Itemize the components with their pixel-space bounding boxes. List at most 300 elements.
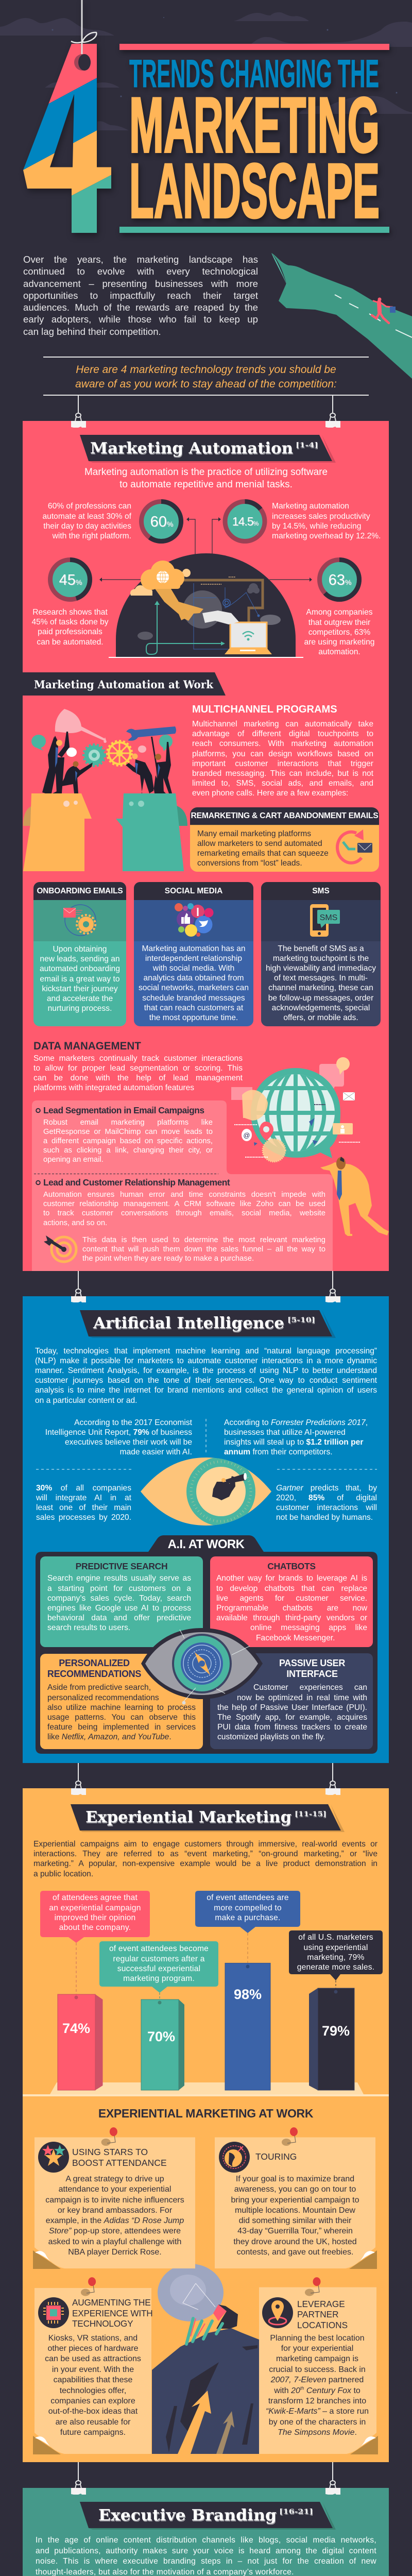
stat: forrester: insights will steal up to $1.2 trillion per (224, 1438, 363, 1447)
multichannel programs text: Multichannel marketing can automatically take (192, 720, 373, 728)
stat: forrester: According to Forrester Predictions 2017, (224, 1418, 368, 1427)
stat: 63% donut (317, 557, 362, 602)
bar value labels (52, 1984, 360, 2045)
section title text: Marketing Automation (90, 439, 293, 457)
stat: 60% text: automate at least 30% of (42, 512, 131, 521)
note text: other pieces of hardware (47, 2344, 139, 2353)
stat: forrester: businesses that utilize AI-powered (224, 1428, 346, 1437)
callout: 79 percent: generate more sales. (297, 1963, 374, 1972)
multichannel programs heading: MULTICHANNEL PROGRAMS (192, 703, 337, 715)
title: trends changing the marketing landscape (119, 44, 391, 236)
card: chatbots: live agents for customer service. (216, 1594, 367, 1603)
note text: are also reusable for (56, 2418, 130, 2427)
stat: 45% text: Research shows that (32, 608, 108, 617)
note text: campaign is to invite niche influencers (45, 2196, 184, 2205)
note heading: LEVERAGE (297, 2299, 345, 2309)
intro paragraph: marketing.” A popular, non-expensive example would be a live product demonstration in (33, 1859, 377, 1868)
lead-in callout with rules: aware of as you work to stay ahead of the competition: (75, 378, 337, 390)
card: predictive search: Search engine results usually serve as (47, 1574, 191, 1583)
note text: Kiosks, VR stations, and (48, 2334, 138, 2343)
panel: artificial intelligence (23, 1296, 389, 1763)
shelf under bars (23, 2081, 389, 2097)
section title text (82, 1807, 330, 1829)
card: predictive search: behavioral data and offer predictive (47, 1614, 191, 1622)
callout: 74 percent: improved their opinion (55, 1913, 135, 1922)
hanging clips: section 3 (75, 1763, 336, 1788)
lead and crm item: content that will push them down the sales funnel – all the way to (82, 1245, 325, 1253)
stat: 30 percent: least one of their main (36, 1503, 131, 1512)
lead and crm item: actions, and so on. (43, 1219, 107, 1227)
callout: 79 percent: marketing, 79% (307, 1953, 365, 1962)
card: remarketing and cart abandonment emails: Many email marketing platforms (197, 829, 311, 838)
note text: technologies offer, (60, 2386, 126, 2395)
card: chatbots: to develop chatbots that can replace (216, 1584, 367, 1593)
intro paragraph: Over the years, the marketing landscape has (23, 254, 258, 265)
lead segmentation item: opening an email. (43, 1156, 104, 1164)
card: passive user interface (210, 1653, 373, 1749)
section title text: [11-15] (295, 1810, 327, 1818)
card: social media: schedule branded messages (142, 994, 245, 1003)
subheading: experiential marketing at work: EXPERIENTIAL MARKETING AT WORK (98, 2107, 313, 2120)
stat: gartner: Gartner predicts that, by (276, 1484, 377, 1492)
data management text: to allow for proper lead segmentation or scoring. This (33, 1064, 243, 1073)
intro paragraph (36, 2535, 376, 2576)
note text: crucial to success. Back in (269, 2365, 366, 2374)
multichannel programs text: limited to, SMS, social ads, and emails, and (192, 779, 373, 788)
multichannel programs text (192, 720, 373, 798)
callout: 74 percent: of attendees agree that (53, 1893, 138, 1902)
note: leverage partner locations (258, 2276, 379, 2454)
illustration: team assembling gears on podiums (23, 709, 187, 871)
card: sms: acknowledgements, special (272, 1004, 370, 1012)
card: sms: SMS (312, 887, 330, 895)
card: predictive search: a starting point for customers on a (47, 1584, 191, 1593)
note text: 2007, 7-Eleven partnered (271, 2376, 364, 2384)
stat: 45% text: 45% of tasks done by (31, 618, 109, 626)
intro paragraph: thought-leaders, but also for the motivation of a company’s workforce. (36, 2568, 294, 2576)
note: using stars (33, 2125, 196, 2269)
stat: 45% donut (48, 557, 92, 602)
note text (35, 2333, 151, 2438)
card: predictive search: search results to users. (47, 1623, 130, 1632)
stat: gartner: 2020, 85% of digital (276, 1494, 377, 1502)
card: sms: of text messages. In multi- (274, 974, 368, 982)
illustration: road with running businessperson (271, 253, 412, 379)
note heading: LOCATIONS (297, 2320, 348, 2330)
bar value labels: 98% (234, 1987, 262, 2002)
section title text: Artificial Intelligence (93, 1314, 284, 1332)
intro paragraph: (NLP) make it possible for marketers to automate customer interactions in a more dynamic (35, 1357, 377, 1365)
data management heading: DATA MANAGEMENT (33, 1040, 141, 1052)
stat: economist: made easier with AI. (120, 1448, 192, 1456)
section title text: [1-4] (296, 442, 318, 449)
card: chatbots: Programmable chatbots are now (216, 1604, 367, 1613)
multichannel programs text: advantage of different digital touchpoints to (192, 730, 373, 738)
stat: 60% text: 60% of professions can (48, 502, 131, 511)
card: passive user interface: Customer experiences can (253, 1683, 367, 1692)
intro paragraph: early adopters, while those who fail to keep up (23, 314, 258, 325)
intro paragraph (35, 1347, 377, 1405)
card: passive user interface: PUI data from fitness trackers to create (217, 1723, 367, 1732)
intro paragraph: Today, technologies that implement machine learning and “natural language processing” (35, 1347, 377, 1355)
data management text: can be done with the help of lead management (33, 1074, 243, 1082)
card: sms: high viewability and immediacy (266, 964, 376, 973)
note text (35, 2174, 195, 2258)
intro paragraph: interactions. They are referred to as “event marketing,” “on-ground marketing,” or “live (33, 1850, 377, 1858)
note: augmenting the experience (33, 2276, 152, 2454)
card: personalized recommendations: usage patterns. You can observe this (47, 1713, 196, 1722)
note heading: EXPERIENCE WITH (72, 2308, 152, 2318)
stat: 60% text (42, 502, 131, 540)
card: personalized recommendations (40, 1654, 203, 1749)
bar: 98 percent (224, 1932, 271, 2092)
ai at work frame (36, 1535, 377, 1754)
card: sms: SMS (320, 913, 337, 922)
note heading: PARTNER (297, 2309, 339, 2319)
card: chatbots: online messaging apps like (250, 1623, 367, 1632)
stat: 63% text (304, 608, 374, 656)
hanging clips: section 4 (67, 2462, 345, 2495)
card: onboarding emails: and accelerate the (47, 994, 113, 1003)
card: chatbots: CHATBOTS (267, 1561, 316, 1571)
stat: 45% donut: 45% (59, 572, 82, 588)
note heading: BOOST ATTENDANCE (72, 2158, 167, 2168)
card: chatbots (210, 1556, 373, 1647)
note text: transform 12 branches into (268, 2397, 366, 2405)
stat: economist (45, 1418, 192, 1456)
callout: 98 percent: of event attendees are (207, 1893, 289, 1902)
card: sms (261, 882, 381, 1026)
card: sms: offers, or mobile ads. (283, 1013, 358, 1022)
callout: 70 percent (99, 1941, 218, 1993)
multichannel programs text: platforms, you can design workflows based on (192, 750, 373, 758)
card: passive user interface: PASSIVE USER (279, 1658, 345, 1668)
callout: 74 percent: an experiential campaign (49, 1904, 141, 1912)
stat: 63% text: that outgrew their (308, 618, 370, 627)
illustration: globe speech bubble with shouting man: @ (243, 1131, 250, 1139)
section title banner (80, 435, 336, 463)
stat: 63% text: competitors, 63% (308, 628, 370, 637)
section title text (88, 2505, 324, 2528)
note text: or key brand ambassadors. For (58, 2206, 172, 2215)
callout: 79 percent: of all U.S. marketers (298, 1933, 373, 1942)
note text: by one of the characters in (269, 2418, 366, 2427)
callout: 98 percent: more compelled to (214, 1904, 282, 1912)
note text: Store” pop-up store, attendees were (49, 2227, 181, 2235)
section title text: Experiential Marketing (85, 1808, 291, 1826)
note text: with 20th Century Fox to (274, 2385, 360, 2395)
card: social media: analytics data obtained from (143, 974, 244, 982)
tab label: A.I. AT WORK (168, 1537, 244, 1551)
panel: marketing automation (23, 421, 389, 1271)
note: touring (214, 2125, 377, 2269)
callout: 98 percent (195, 1891, 300, 1933)
stat: 30 percent: will integrate AI in at (36, 1494, 131, 1502)
card: remarketing and cart abandonment emails (190, 807, 379, 872)
intro paragraph: and publications, authority makes sure your voice is heard among the digital content (36, 2546, 376, 2555)
card: remarketing and cart abandonment emails: allow marketers to send automated (197, 839, 322, 848)
note heading: AUGMENTING THE (72, 2297, 151, 2308)
stat: 60% text: with the right platform. (53, 532, 131, 540)
note text: capabilities that these (54, 2376, 132, 2384)
note text: marketing campaign is (276, 2354, 358, 2363)
card: passive user interface: customized playlists on the fly. (217, 1733, 325, 1741)
callout: 70 percent: successful experiential (117, 1964, 200, 1973)
card: onboarding emails: kickstart their journey (42, 985, 118, 993)
data management text: platforms with integrated automation features (33, 1083, 194, 1092)
note text: bring your experiential campaign to (231, 2196, 359, 2205)
card: personalized recommendations: like Netflix, Amazon, and YouTube. (47, 1733, 171, 1741)
note text: they drove around the UK, hosted (233, 2238, 357, 2246)
lead and crm item: Lead and Customer Relationship Management (43, 1177, 230, 1188)
card: passive user interface: now be optimized in real time with (237, 1693, 367, 1702)
title: big numeral 4 with string (23, 0, 114, 237)
illustration: eye with telescope man (141, 1458, 271, 1526)
tab and frame background (36, 1535, 377, 1754)
stat: 14.5% donut: 14.5% (232, 515, 259, 528)
card: remarketing and cart abandonment emails: conversions from “lost” leads. (197, 859, 302, 868)
note text: out-of-the-box ideas that (48, 2407, 138, 2416)
illustration: cloud and laptop hands dome (109, 553, 303, 658)
callout: 98 percent: make a purchase. (215, 1913, 281, 1922)
card: social media (134, 882, 253, 1026)
lead segmentation item: GetResponse or MailChimp can move leads to (43, 1128, 213, 1136)
subheading banner: marketing automation at work: Marketing Automation at Work (34, 678, 213, 691)
stat: 14.5% text: marketing overhead by 12.2%. (272, 532, 381, 540)
stat: economist: According to the 2017 Economist (74, 1418, 192, 1427)
card: personalized recommendations: PERSONALIZED (59, 1658, 130, 1668)
note text: The Simpsons Movie. (278, 2428, 357, 2437)
card: social media: Marketing automation has an (142, 944, 246, 953)
lead segmentation item: a different campaign based on specific actions, (43, 1137, 213, 1145)
section title banner (80, 1310, 336, 1338)
note heading: TECHNOLOGY (72, 2318, 133, 2329)
stat: 60% text: their day to day activities (43, 522, 131, 531)
card: predictive search: company’s sales cycle. Today, search (47, 1594, 191, 1603)
bar value labels: 79% (322, 2023, 350, 2039)
header background clouds (0, 12, 412, 130)
note text (215, 2174, 375, 2258)
callout: 74 percent: about the company. (59, 1923, 131, 1932)
note text: A great strategy to drive up (65, 2175, 164, 2183)
note heading: USING STARS TO (72, 2147, 148, 2157)
definition: to automate repetitive and menial tasks. (119, 479, 293, 490)
lead-in callout with rules (43, 357, 369, 396)
lead and crm item (36, 1177, 325, 1263)
note text: future campaigns. (60, 2428, 126, 2437)
illustration: compass eye (141, 1628, 263, 1704)
dashed dividers (36, 1419, 377, 1469)
section title text: Executive Branding (98, 2506, 277, 2524)
intro paragraph (23, 254, 258, 337)
card: sms: channel marketing, these can (268, 984, 373, 992)
lead segmentation item (36, 1105, 213, 1164)
note text: can be used as attractions (45, 2354, 141, 2363)
stat: 30 percent: sales processes by 2020. (36, 1513, 131, 1522)
note heading (72, 2147, 167, 2168)
stat: forrester: annum from their competitors. (224, 1448, 333, 1456)
bar chart: experiential stats (23, 1891, 389, 2097)
card: sms: marketing touchpoint is the (273, 954, 369, 963)
note text: If your goal is to maximize brand (236, 2175, 354, 2183)
hanging clips: section 2 (75, 1271, 336, 1296)
stat: 14.5% donut (222, 499, 267, 544)
card: chatbots: Facebook Messenger. (256, 1633, 335, 1642)
lead segmentation item: Lead Segmentation in Email Campaigns (43, 1105, 204, 1115)
bar value labels: 74% (62, 2021, 90, 2036)
stat: 14.5% text: by 14.5%, while reducing (272, 522, 361, 531)
binder clips (71, 421, 340, 428)
callout: 79 percent: using experiential (304, 1943, 368, 1952)
card: personalized recommendations: Aside from predictive search, (47, 1683, 151, 1692)
callout: 70 percent: of event attendees become (109, 1944, 209, 1953)
lead segmentation item: such as clicking a link, changing their city, or (43, 1146, 213, 1155)
intro paragraph: on a particular content or ad. (35, 1396, 138, 1405)
card: remarketing and cart abandonment emails: remarketing emails that can squeeze (197, 849, 329, 858)
stat: 63% text: Among companies (306, 608, 373, 617)
lead and crm item: to track customer conversations through emails, social media, website (43, 1209, 325, 1217)
binder clips (71, 1296, 340, 1302)
stat: gartner (276, 1484, 377, 1522)
card: sms: The benefit of SMS as a (278, 944, 364, 953)
note text: awareness, you can go on tour to (234, 2185, 356, 2194)
illustration: mountain with light bulb (152, 2263, 259, 2454)
note text (259, 2333, 375, 2438)
multichannel programs text: reach consumers. With marketing automation (192, 739, 373, 748)
intro paragraph: can lag behind their competition. (23, 326, 161, 337)
stat: 30 percent: 30% of all companies (36, 1484, 131, 1492)
card: onboarding emails: email is a great way to (40, 975, 120, 983)
subheading banner: marketing automation at work (23, 672, 226, 696)
stat: 60% donut (139, 499, 183, 544)
multichannel programs text: important customer interactions that trigger (192, 759, 373, 768)
note text: 43-day “Guerrilla Tour,” wherein (237, 2227, 353, 2235)
card: passive user interface: The Spotify app, for example, acquires (217, 1713, 367, 1722)
bar value labels: 70% (147, 2029, 175, 2044)
data management text: Some marketers continually track customer interactions (33, 1054, 243, 1062)
light card with two lead items (32, 1100, 333, 1271)
note text: NBA player Derrick Rose. (68, 2248, 162, 2257)
note text: in your event. With the (52, 2365, 134, 2374)
hanging clips: section 1 (75, 396, 336, 421)
card: predictive search: PREDICTIVE SEARCH (76, 1561, 167, 1571)
section title banner (71, 1804, 345, 1833)
card: social media: with social media. With (153, 964, 234, 973)
stat: 45% text: paid professionals (38, 628, 102, 636)
stat: forrester (224, 1418, 368, 1456)
note text: contests, and gave out freebies. (237, 2248, 353, 2257)
card: onboarding emails (33, 882, 126, 1026)
stat: gartner: not be handled by humans. (276, 1513, 373, 1522)
stat: gartner: customer interactions will (276, 1503, 377, 1512)
stat: 63% donut: 63% (329, 572, 351, 588)
definition: Marketing automation is the practice of utilizing software (84, 467, 328, 478)
stat: 63% text: are using marketing (304, 638, 374, 647)
card: onboarding emails: new leads, sending an (40, 955, 120, 963)
note heading (72, 2297, 152, 2329)
callout: 70 percent: regular customers after a (113, 1955, 205, 1963)
callout: 74 percent (40, 1891, 150, 1943)
stat: 45% text (31, 608, 109, 647)
card: social media: social networks, marketers can (139, 984, 249, 992)
card: remarketing and cart abandonment emails: REMARKETING & CART ABANDONMENT EMAILS (191, 811, 378, 820)
stat: economist: executives believe their work will be (65, 1438, 192, 1447)
section title text: [16-21] (279, 2508, 313, 2516)
card: social media: SOCIAL MEDIA (165, 887, 222, 895)
definition (84, 467, 328, 490)
stat: 63% text: automation. (318, 648, 360, 656)
binder clips (71, 2488, 341, 2495)
stat: 45% text: can be automated. (37, 638, 104, 647)
bar: 79 percent (308, 1978, 355, 2092)
card: personalized recommendations: also utilize machine learning to process (47, 1703, 196, 1712)
note text: “Kwik-E-Marts” – a store run (266, 2407, 369, 2416)
card: predictive search: engines like Google use AI to process (47, 1604, 191, 1613)
intro paragraph: Experiential campaigns aim to engage customers through immersive, real-world events or (33, 1840, 377, 1849)
stat: 14.5% text (272, 502, 381, 540)
intro paragraph: advancement – presenting businesses with more (23, 278, 258, 289)
card: passive user interface: INTERFACE (286, 1669, 338, 1679)
intro paragraph: opportunities to impactfully reach their target (23, 290, 258, 301)
stat: 14.5% text: increases sales productivity (272, 512, 370, 521)
callout: 70 percent: marketing program. (123, 1974, 195, 1983)
note text: for your experiential (281, 2344, 353, 2353)
card: onboarding emails: nurturing process. (48, 1004, 112, 1013)
intro paragraph: a public location. (33, 1870, 93, 1878)
binder clips (71, 1788, 341, 1795)
card: onboarding emails: ONBOARDING EMAILS (37, 887, 123, 895)
card: personalized recommendations: personalized recommendations (47, 1693, 159, 1702)
card: onboarding emails: automated onboarding (40, 964, 120, 973)
note text: attendance to your experiential (59, 2185, 171, 2194)
intro paragraph: noise. This is where executive branding steps in – not just for the creation of new (36, 2557, 376, 2566)
intro paragraph: continued to evolve with every technological (23, 266, 258, 277)
note text: Planning the best location (270, 2334, 365, 2343)
panel: executive branding (23, 2488, 389, 2576)
intro paragraph: customer journeys based on the tone of their sentences. One way to conduct sentiment (35, 1376, 377, 1385)
multichannel programs text: even phone calls. Here are a few examples: (192, 789, 348, 798)
stat: 30 percent (36, 1484, 131, 1522)
illustration: globe speech bubble with shouting man (231, 1057, 389, 1236)
note text: companies can explore (50, 2397, 135, 2405)
lead and crm item: the point when they are ready to make a purchase. (82, 1255, 254, 1263)
arrows from dome to stats (99, 517, 312, 582)
card: personalized recommendations: feature being implemented in services (47, 1723, 196, 1732)
card: chatbots: available through third-party vendors or (216, 1614, 367, 1622)
card: passive user interface: the help of Passive User Interface (PUI). (217, 1703, 367, 1712)
lead and crm item: This data is then used to determine the most relevant marketing (82, 1236, 325, 1244)
stat: 60% donut: 60% (150, 514, 173, 530)
note text: asked to win a playful challenge with (48, 2238, 181, 2246)
section title text: [5-10] (287, 1316, 315, 1324)
card: predictive search (40, 1556, 203, 1647)
intro paragraph: manner. Sentiment Analysis, for example, is the process of using NLP to better understand (35, 1366, 377, 1375)
card: social media: interdependent relationship (145, 954, 242, 963)
intro paragraph: analysis is to mine the internet for brand mentions and collect the general opinion of users (35, 1386, 377, 1395)
note text: example, in the Adidas “D Rose Jump (46, 2216, 184, 2225)
card: sms: be follow-up messages, order (268, 994, 373, 1003)
stat: economist: Intelligence Unit Report, 79% of business (45, 1428, 192, 1437)
section title banner (80, 2502, 337, 2530)
card: personalized recommendations: RECOMMENDATIONS (47, 1669, 141, 1679)
intro paragraph (33, 1839, 377, 1879)
data management text (33, 1054, 243, 1092)
lead and crm item: customer relationship management. A CRM software like Zoho can be used (43, 1200, 325, 1208)
card: social media: that can reach customers at (144, 1004, 243, 1012)
card: onboarding emails: Upon obtaining (53, 945, 107, 954)
lead segmentation item: Robust email marketing platforms like (43, 1118, 213, 1126)
lead and crm item: Automation ensures human error and time constraints doesn’t impede with (43, 1191, 325, 1199)
